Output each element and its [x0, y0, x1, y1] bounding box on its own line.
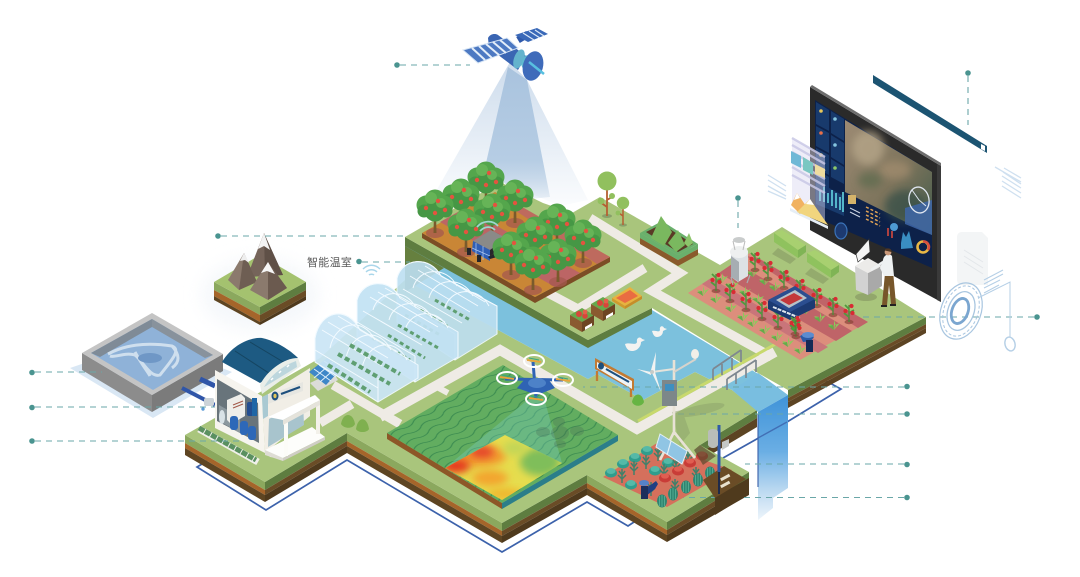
pipes and pump: [182, 379, 215, 411]
crates: [570, 287, 642, 332]
building roof: [222, 338, 298, 383]
right floating data graphic: [768, 167, 1021, 352]
greenhouse 1: [315, 314, 418, 402]
small trees: [598, 172, 629, 227]
lower right crop bed: [603, 443, 732, 508]
target rings: [932, 277, 990, 345]
soil sensor mast: [708, 425, 729, 494]
mountains: [228, 233, 287, 300]
stat cards: [816, 102, 844, 216]
connector dots: [29, 62, 1040, 500]
soil heat map: [445, 435, 562, 500]
harvesting robot: [768, 286, 815, 336]
hedge: [199, 428, 258, 462]
upper platform ground: [405, 182, 926, 390]
canal water: [405, 245, 760, 400]
orchard trees: [416, 162, 602, 268]
lower right robot: [639, 480, 658, 499]
orchard trees front: [492, 232, 576, 295]
soil cross-section cut: [694, 445, 749, 515]
bridge railings: [713, 350, 756, 390]
right crop bed: [688, 252, 868, 360]
monitor wall: [810, 85, 941, 302]
drone shadow: [536, 417, 584, 448]
water equipment: [219, 394, 257, 440]
main platform side walls: [185, 317, 926, 543]
operator kiosk: [855, 239, 882, 301]
orchard bed: [422, 192, 610, 303]
greenhouse 2: [357, 284, 458, 382]
wooden sign: [595, 358, 634, 397]
soil monitoring station: [730, 237, 750, 285]
shrubs: [341, 394, 644, 432]
orchard robot: [467, 222, 506, 262]
mountain island: [202, 233, 318, 331]
tomato tray: [612, 287, 642, 309]
lower platform ground: [185, 280, 757, 523]
solar panel: [656, 434, 687, 464]
solar panel at greenhouse: [309, 358, 342, 391]
crop plants: [697, 252, 855, 354]
dark title bar: [873, 75, 987, 153]
pool: [70, 313, 232, 418]
water treatment building: [215, 338, 325, 461]
ducks: [625, 326, 667, 351]
green benches: [772, 230, 839, 284]
crop field: [387, 365, 618, 509]
cable line behind platform: [197, 381, 841, 552]
greenhouses: [315, 262, 497, 402]
raised leaf bed: [640, 216, 698, 266]
waterfall: [732, 373, 788, 520]
dashboard screen: [815, 100, 932, 268]
roads: [320, 218, 775, 429]
yellow lawn strip: [638, 338, 786, 421]
dashed connector lines and dots: [35, 65, 1034, 498]
satellite map: [845, 120, 932, 235]
satellite beam: [435, 62, 588, 206]
floating chart panels: [790, 138, 828, 229]
greenhouse label: 智能温室: [307, 255, 352, 269]
building sign: [268, 382, 303, 404]
drone: [497, 355, 573, 405]
upper island wall: [405, 237, 652, 348]
field sensor: [800, 332, 814, 352]
wind turbine: [637, 352, 674, 392]
satellite: [463, 28, 548, 83]
faint document icon: [957, 232, 988, 285]
greenhouse 3: [397, 262, 497, 360]
weather station with solar panel: [656, 349, 725, 464]
logo emblem: [835, 223, 847, 239]
data tables and charts: [848, 195, 929, 252]
wifi icon: [363, 265, 380, 275]
portico: [265, 395, 325, 461]
operator: [871, 248, 896, 307]
drone spray beam: [445, 398, 562, 468]
